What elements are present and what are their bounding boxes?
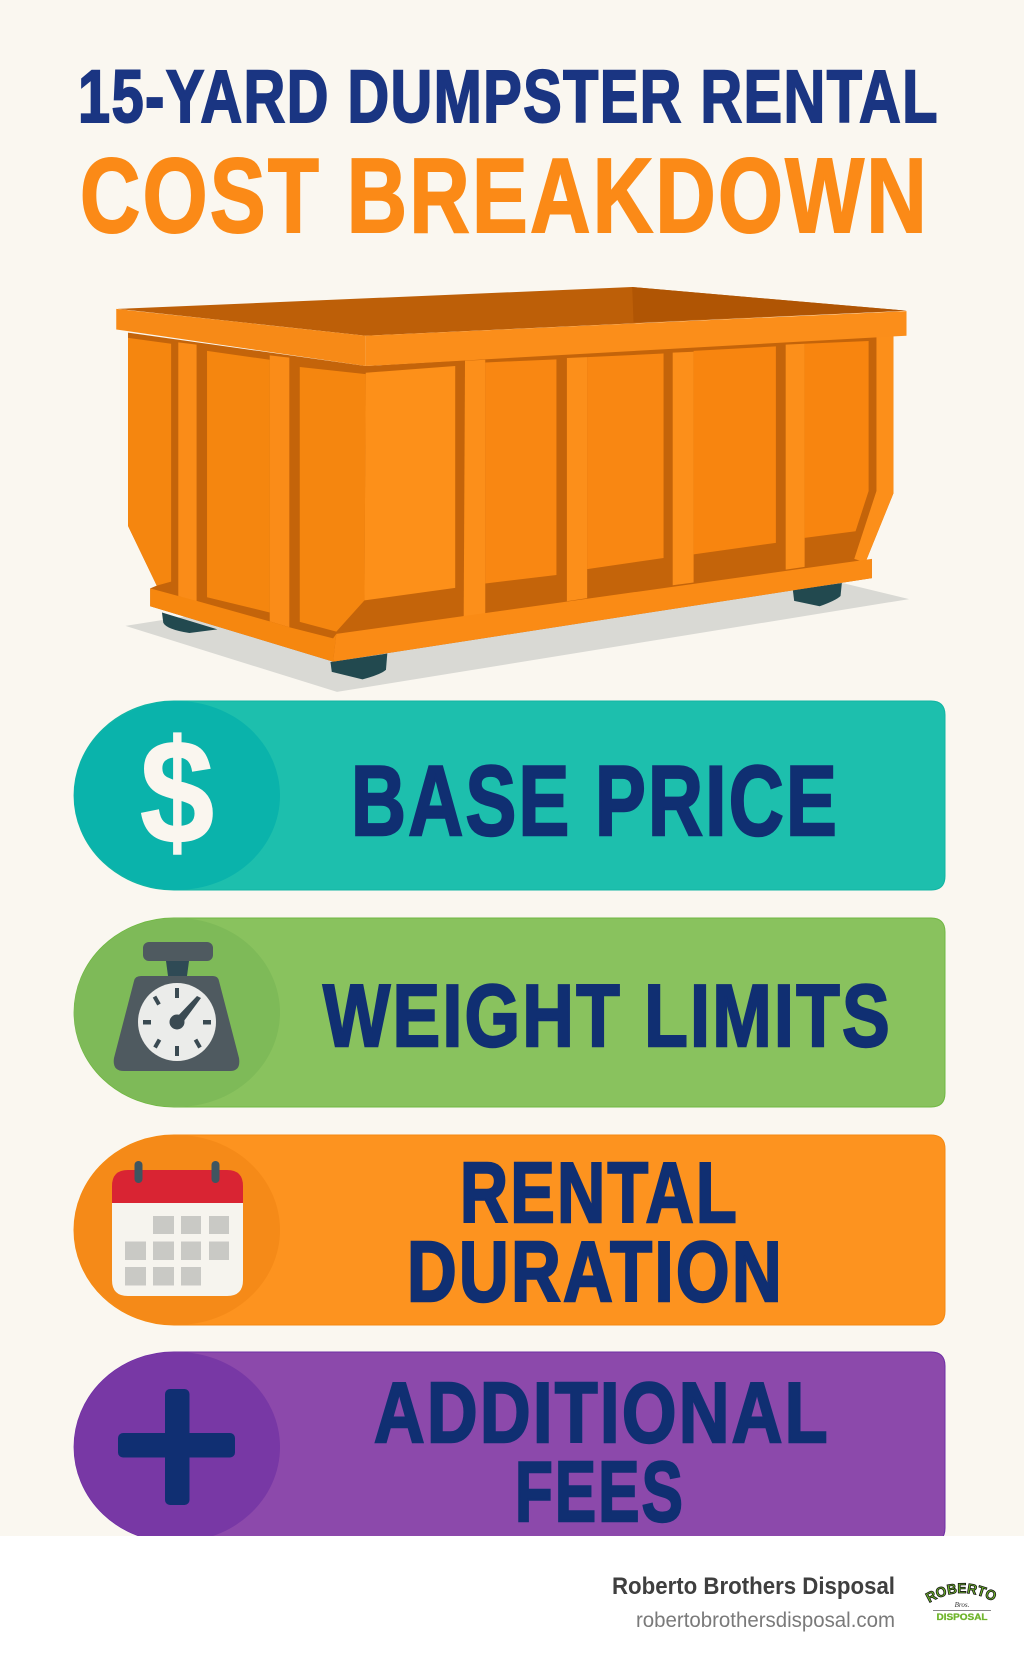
logo — [924, 1582, 996, 1622]
top rim — [116, 309, 366, 366]
heading: FEES — [515, 1445, 685, 1540]
heading — [374, 1366, 830, 1540]
website: robertobrothersdisposal.com — [636, 1609, 895, 1632]
logo: DISPOSAL — [936, 1612, 988, 1622]
title — [78, 55, 939, 255]
left lower rail — [150, 588, 336, 662]
bar — [74, 1352, 945, 1542]
icon: weighing scale — [114, 942, 239, 1071]
heading: WEIGHT LIMITS — [323, 966, 892, 1065]
right face ribs — [464, 335, 893, 617]
left face panels — [128, 338, 366, 632]
bar — [74, 1135, 945, 1325]
panel: additional fees — [74, 1352, 945, 1542]
wheels — [162, 583, 842, 679]
icon circle — [74, 918, 280, 1107]
icon circle — [74, 701, 280, 890]
heading: ADDITIONAL — [374, 1366, 830, 1461]
icon circle — [74, 1135, 280, 1325]
icon: plus — [118, 1389, 235, 1505]
left face ribs — [178, 342, 289, 627]
footer — [0, 1536, 1024, 1666]
panel: rental duration — [74, 1135, 945, 1325]
bar — [74, 918, 945, 1107]
panel: weight limits — [74, 918, 945, 1107]
right face panels — [364, 366, 455, 600]
dumpster body base — [128, 333, 893, 662]
bar — [74, 701, 945, 890]
heading: RENTAL — [460, 1146, 739, 1241]
illustration: orange dumpster — [116, 287, 909, 692]
right lower rail — [333, 559, 872, 662]
heading: BASE PRICE — [351, 745, 839, 856]
icon circle — [74, 1352, 280, 1542]
heading — [407, 1146, 784, 1320]
ground shadow — [125, 583, 909, 692]
logo: ROBERTO — [924, 1582, 996, 1603]
heading: DURATION — [407, 1225, 784, 1320]
logo: Bros. — [955, 1601, 970, 1609]
icon: calendar — [112, 1161, 243, 1296]
interior walls — [118, 287, 907, 336]
panel: base price — [74, 701, 945, 890]
icon: dollar sign: $ — [140, 710, 214, 875]
company name: Roberto Brothers Disposal — [612, 1573, 895, 1600]
